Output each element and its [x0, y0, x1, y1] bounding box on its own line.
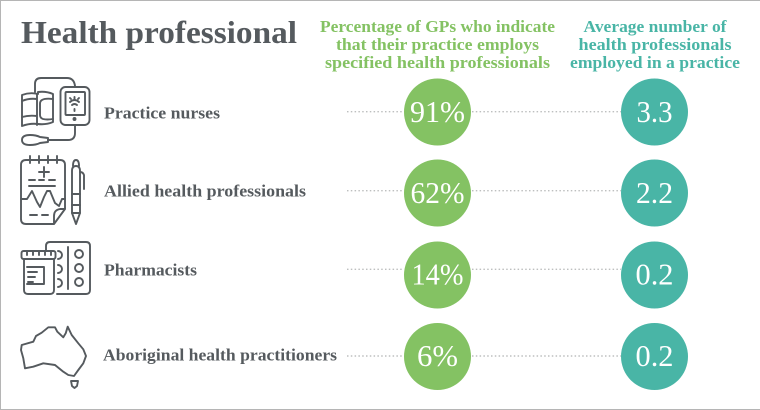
title: Health professional [21, 14, 297, 50]
row: pharmacists [22, 242, 688, 308]
heading: average number column [570, 17, 740, 72]
heading: average number column: employed in a practice [570, 53, 740, 72]
circle: 62% [404, 160, 471, 226]
row: practice nurses [22, 78, 688, 146]
circle: 91%: 91% [410, 94, 465, 129]
label: Practice nurses [104, 104, 220, 122]
circle: 0.2: 0.2 [636, 338, 674, 373]
circle: 2.2 [621, 160, 688, 226]
icon: clipboard and pen [21, 156, 84, 224]
icon: pill bottle and blister pack [22, 242, 90, 294]
heading: percentage of GPs column: specified health professionals [325, 53, 550, 72]
icon: map of Australia [21, 327, 86, 388]
circle: 14% [404, 242, 471, 308]
dotted leader [347, 268, 621, 270]
label: Allied health professionals [104, 182, 306, 200]
circle: 91% [404, 78, 471, 146]
row: aboriginal health practitioners [21, 323, 688, 390]
circle: 3.3 [621, 78, 688, 146]
dotted leader [347, 355, 621, 357]
circle: 0.2 [621, 242, 688, 308]
heading: average number column: Average number of [584, 17, 727, 36]
circle: 14%: 14% [412, 256, 464, 292]
dotted leader [347, 190, 621, 192]
row: allied health professionals [21, 156, 688, 226]
heading: average number column: health professionals [578, 35, 732, 54]
circle: 2.2: 2.2 [636, 175, 673, 210]
heading: percentage of GPs column: that their practice employs [336, 35, 539, 54]
icon: blood pressure monitor [22, 78, 90, 145]
circle: 3.3: 3.3 [636, 94, 672, 129]
circle: 0.2 [621, 323, 688, 390]
circle: 62%: 62% [410, 175, 464, 210]
heading: percentage of GPs column: Percentage of GPs who indicate [320, 17, 555, 36]
label: Aboriginal health practitioners [103, 346, 337, 364]
circle: 0.2: 0.2 [636, 256, 674, 292]
label: Pharmacists [104, 260, 197, 280]
circle: 6% [404, 323, 471, 390]
dotted leader [347, 111, 621, 113]
heading: percentage of GPs column [320, 17, 555, 72]
circle: 6%: 6% [417, 338, 458, 373]
